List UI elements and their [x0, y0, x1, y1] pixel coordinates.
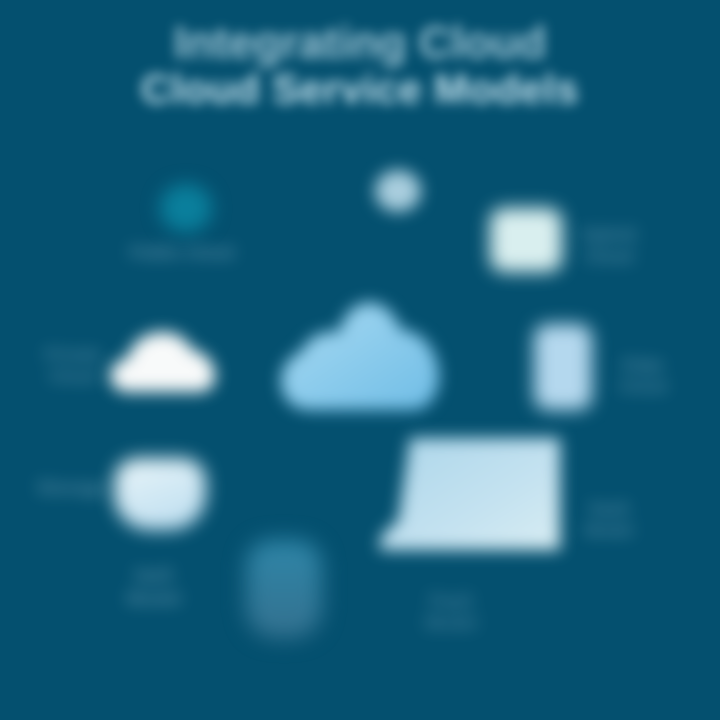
- icon: small top node: [375, 170, 421, 212]
- label: top right: [581, 224, 638, 267]
- label: right lower: [584, 499, 634, 540]
- label: left upper: Private: [45, 345, 101, 364]
- icon: bottom cylinder: [246, 540, 322, 638]
- label: bottom left: [124, 564, 182, 610]
- label: top right: Cloud: [585, 247, 633, 266]
- icon: white cloud left: [98, 319, 228, 406]
- icon: top right square: [490, 208, 562, 272]
- label: top left: Public Cloud: [130, 243, 234, 262]
- icon: teal node top left: [160, 184, 212, 232]
- title: Cloud Service Models: [141, 66, 579, 112]
- title: [134, 17, 584, 112]
- label: right middle: [619, 355, 667, 396]
- label: bottom left: IaaS: [134, 565, 174, 586]
- label: right lower: SaaS: [588, 499, 630, 518]
- label: top right: Hybrid: [582, 225, 636, 244]
- label: bottom center: Model: [425, 613, 477, 633]
- label: bottom center: PaaS: [429, 591, 473, 611]
- icon: right tall device: [534, 324, 592, 410]
- label: right middle: Cloud: [619, 377, 667, 396]
- label: right lower: Model: [584, 521, 634, 540]
- label: bottom left: Model: [127, 589, 181, 610]
- label: bottom center: [424, 591, 477, 633]
- icon: central cloud: [270, 292, 450, 422]
- label: left upper: [45, 345, 101, 386]
- icon: left rounded box: [114, 458, 206, 530]
- label: left lower: Storage: [37, 478, 107, 499]
- icon: laptop: [369, 426, 573, 563]
- title: Integrating Cloud: [174, 17, 546, 68]
- label: left upper: Cloud: [49, 367, 97, 386]
- label: right middle: Edge: [622, 355, 664, 374]
